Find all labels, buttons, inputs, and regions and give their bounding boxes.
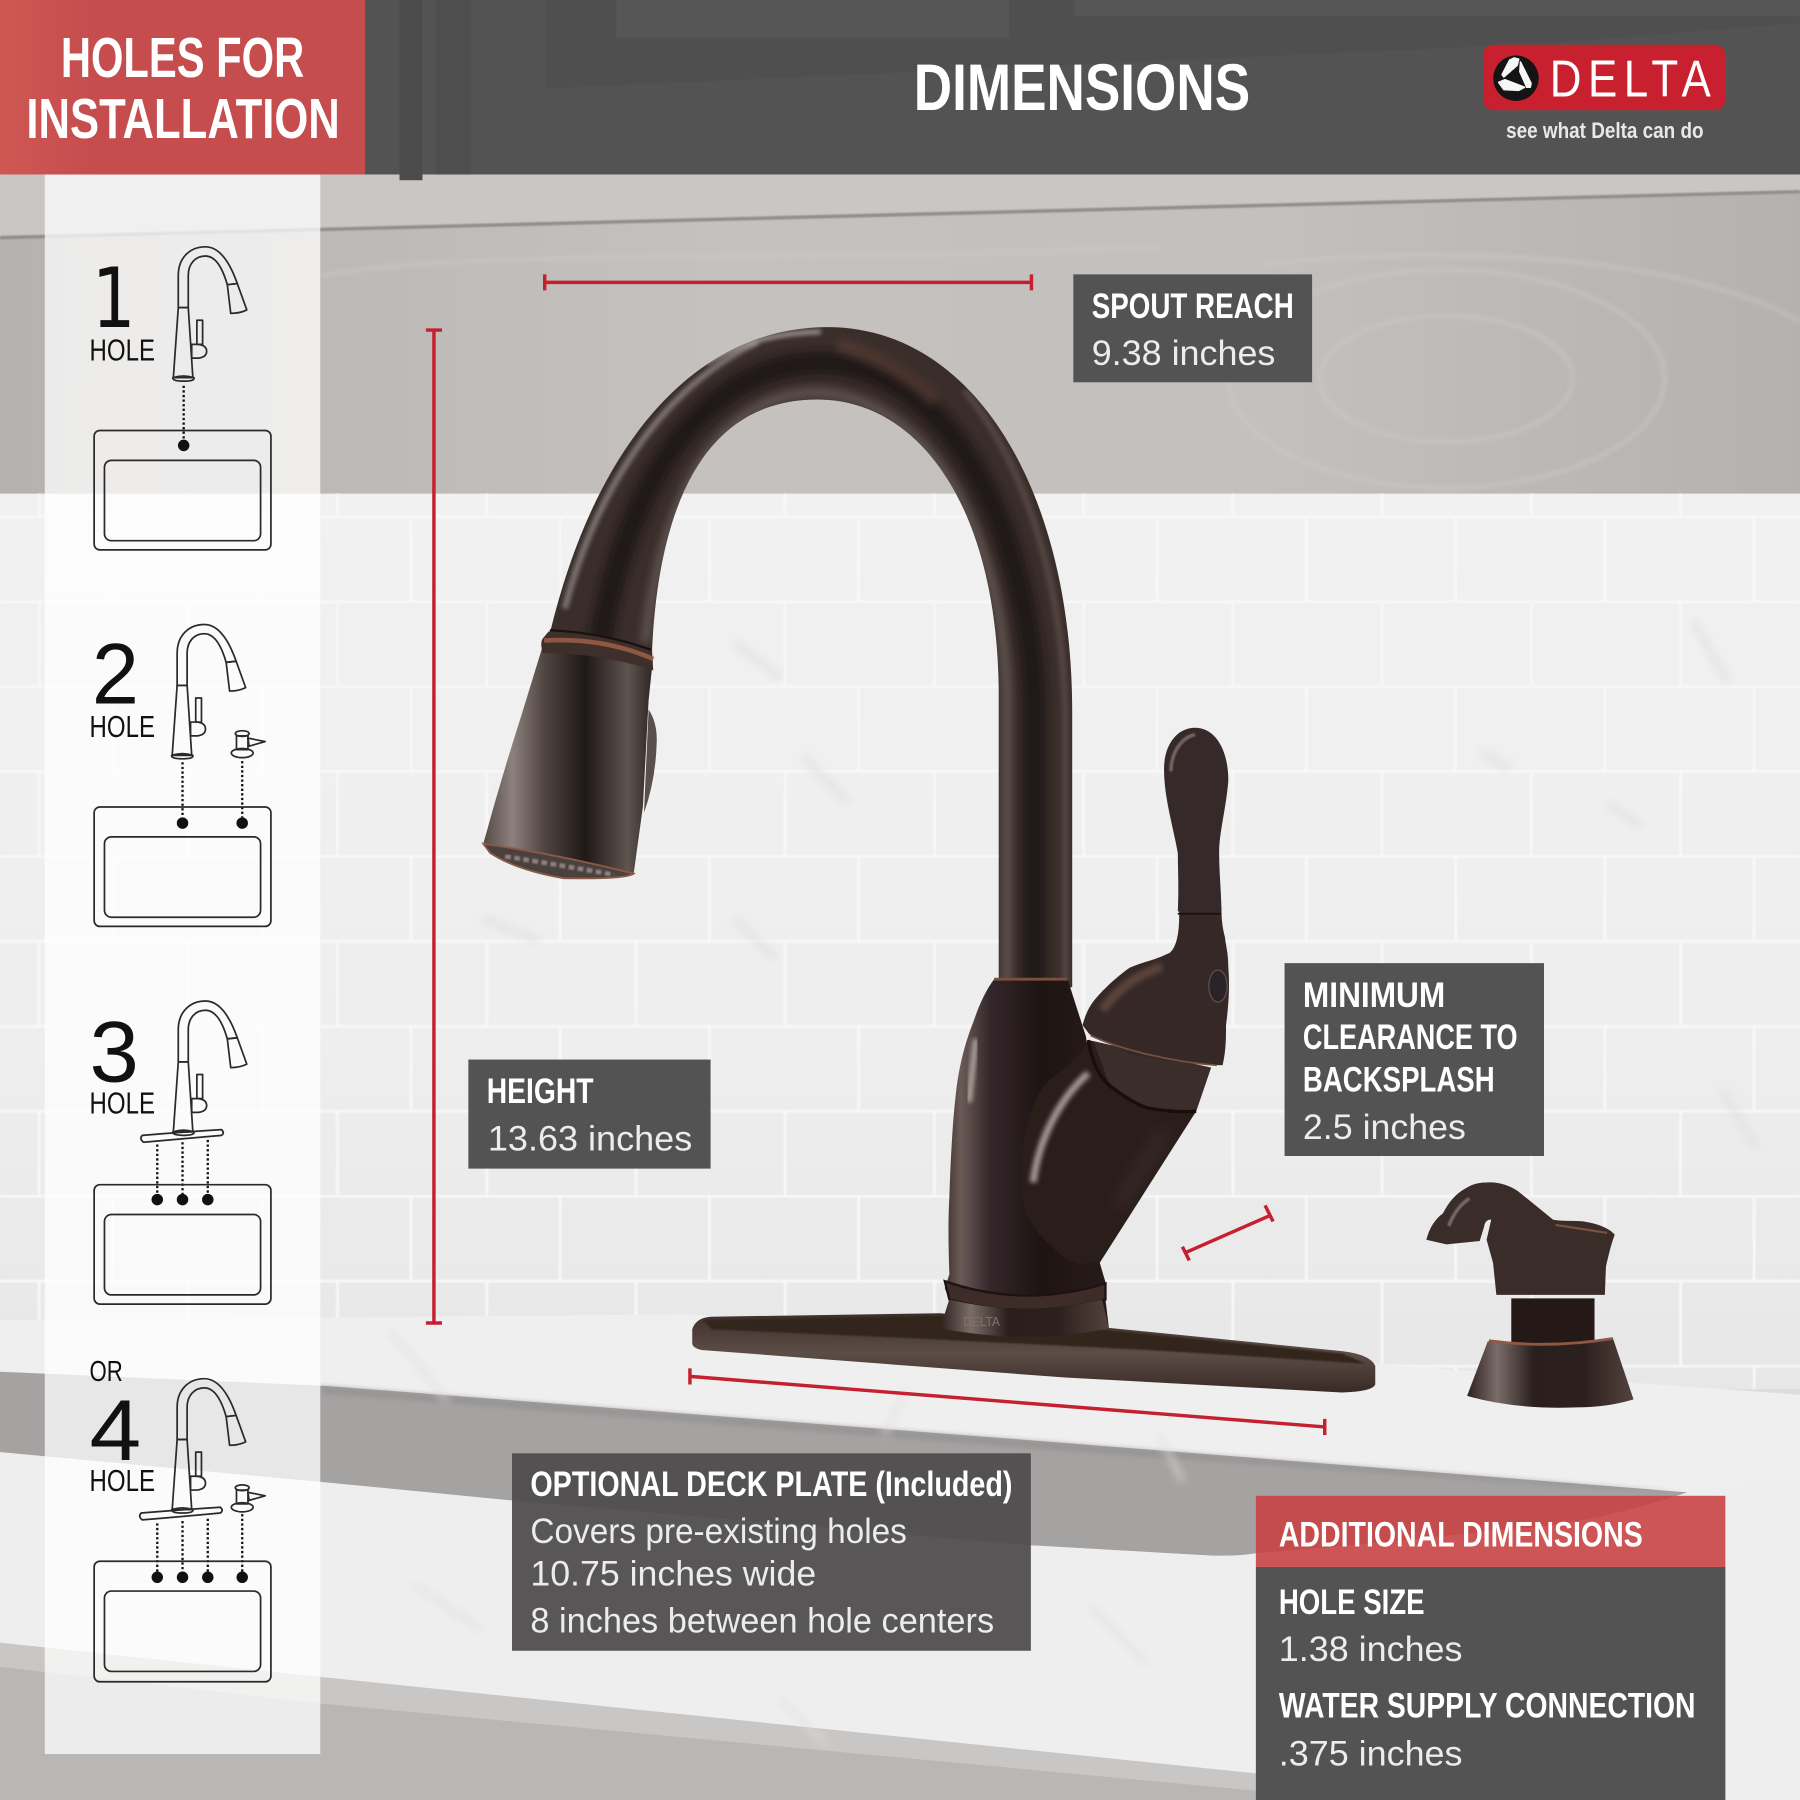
lever shading bbox=[1027, 1041, 1211, 1186]
option: 3 hole: 3 bbox=[90, 1004, 139, 1100]
option: 1 hole bbox=[90, 247, 271, 550]
lever housing lower bbox=[1022, 1040, 1211, 1264]
collar bbox=[541, 631, 653, 670]
header bar bbox=[0, 0, 1800, 180]
handle bbox=[1164, 728, 1228, 911]
deck plate top face bbox=[703, 1316, 1366, 1364]
callout: minimum clearance: MINIMUM bbox=[1303, 975, 1445, 1015]
option: 1 hole: 1 bbox=[92, 251, 135, 347]
option: 2 hole: 2 bbox=[92, 627, 139, 723]
heading: dimensions: DIMENSIONS bbox=[914, 51, 1250, 124]
soap dispenser photo bbox=[1426, 1182, 1634, 1408]
option: or 4 hole bbox=[90, 1356, 271, 1682]
option: 3 hole bbox=[90, 1001, 271, 1304]
panel: additional dimensions: ADDITIONAL DIMENSIONS bbox=[1279, 1514, 1643, 1554]
callout: height: 13.63 inches bbox=[488, 1118, 692, 1158]
option: 2 hole: HOLE bbox=[90, 709, 155, 744]
panel: additional dimensions: 1.38 inches bbox=[1279, 1629, 1462, 1669]
dimension line: deck plate width bbox=[690, 1368, 1325, 1435]
panel: additional dimensions: HOLE SIZE bbox=[1279, 1582, 1425, 1622]
option: or 4 hole: OR bbox=[90, 1356, 123, 1388]
panel: additional dimensions bbox=[1256, 1496, 1725, 1800]
callout: optional deck plate: 10.75 inches wide bbox=[530, 1553, 816, 1593]
spray face bbox=[483, 844, 634, 878]
dimension line: spout reach bbox=[544, 274, 1032, 290]
base ring bbox=[945, 1281, 1105, 1310]
option: 3 hole: HOLE bbox=[90, 1086, 155, 1121]
dimension line: clearance to backsplash bbox=[1182, 1205, 1273, 1260]
lever cap bbox=[1083, 907, 1229, 1065]
panel: hole options bbox=[45, 174, 320, 1754]
callout: minimum clearance bbox=[1285, 963, 1544, 1156]
dimension line: height bbox=[426, 329, 442, 1324]
callout: minimum clearance: BACKSPLASH bbox=[1303, 1060, 1495, 1100]
panel: additional dimensions: .375 inches bbox=[1279, 1734, 1462, 1774]
spray head bbox=[483, 645, 653, 878]
callout: optional deck plate: Covers pre-existing holes bbox=[530, 1511, 907, 1551]
callout: optional deck plate bbox=[512, 1453, 1031, 1651]
callout: optional deck plate: 8 inches between hole centers bbox=[530, 1600, 994, 1640]
callout: height: HEIGHT bbox=[487, 1071, 594, 1111]
icon: Delta triangle mark bbox=[1493, 56, 1539, 101]
deck plate bbox=[692, 1313, 1375, 1392]
panel: additional dimensions: WATER SUPPLY CONNECTION bbox=[1279, 1685, 1696, 1725]
option: or 4 hole: 4 bbox=[90, 1383, 141, 1479]
spout shading bbox=[565, 332, 1065, 987]
faucet body bbox=[940, 979, 1109, 1328]
callout: spout reach: 9.38 inches bbox=[1092, 333, 1275, 373]
logo: Delta bbox=[1483, 45, 1725, 143]
option: 1 hole: HOLE bbox=[90, 332, 155, 367]
faucet photo bbox=[483, 327, 1375, 1392]
callout: spout reach: SPOUT REACH bbox=[1092, 286, 1294, 326]
base skirt bbox=[940, 1299, 1109, 1337]
callout: optional deck plate: OPTIONAL DECK PLATE (Included) bbox=[530, 1464, 1013, 1504]
panel: holes for installation heading: HOLES FOR bbox=[61, 26, 304, 89]
option: 2 hole bbox=[90, 624, 271, 926]
callout: height bbox=[468, 1060, 711, 1169]
option: or 4 hole: HOLE bbox=[90, 1463, 155, 1498]
spray head side button bbox=[644, 709, 657, 813]
panel: holes for installation heading: INSTALLATION bbox=[26, 87, 340, 150]
temperature dot bbox=[1209, 970, 1227, 1002]
spout arc bbox=[550, 327, 1072, 987]
callout: minimum clearance: 2.5 inches bbox=[1303, 1107, 1466, 1147]
callout: spout reach bbox=[1073, 274, 1312, 382]
DELTA stamp: DELTA bbox=[963, 1315, 1000, 1329]
callout: minimum clearance: CLEARANCE TO bbox=[1303, 1017, 1518, 1057]
logo: Delta: DELTA bbox=[1550, 51, 1711, 108]
logo: Delta: see what Delta can do bbox=[1506, 118, 1704, 143]
panel: holes for installation heading bbox=[0, 0, 365, 174]
